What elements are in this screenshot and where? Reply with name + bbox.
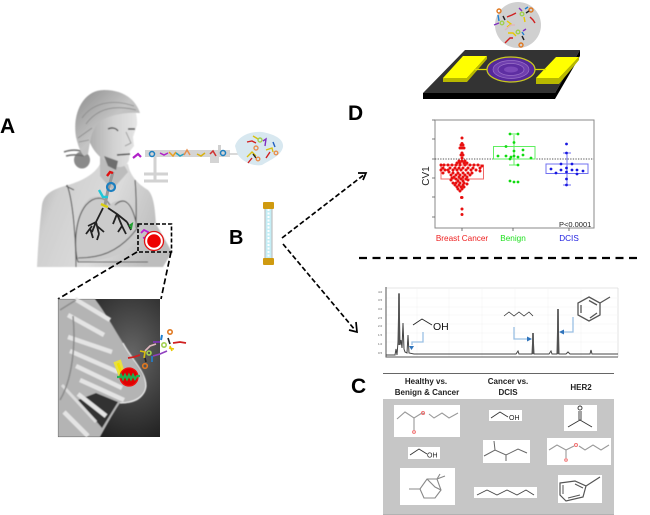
dark background: [58, 299, 160, 437]
acetone structure: [564, 405, 597, 431]
y tick labels: 3.5: [378, 298, 383, 302]
nose shadow: [125, 132, 131, 146]
dcis box: [546, 153, 588, 185]
dashed zoom lines: [58, 252, 171, 299]
ethanol structure 2: OH: [509, 415, 520, 422]
plot frame: [435, 120, 594, 228]
arrow to sensor: [282, 173, 366, 238]
column headers: Benign & Cancer: [395, 388, 459, 397]
benign box: [494, 134, 535, 165]
electrodes: [443, 56, 487, 78]
VOC sensor chip: [423, 2, 580, 99]
dashed section divider: [359, 257, 640, 259]
column headers: DCIS: [498, 388, 518, 397]
group labels: [436, 234, 579, 243]
connectors: [475, 68, 546, 70]
column headers: Healthy vs.: [405, 377, 447, 386]
ethanol structure: [413, 319, 449, 333]
lung shading: [75, 196, 138, 262]
illustration: woman with lungs: [37, 90, 172, 267]
trace: [386, 293, 618, 355]
benign points: [498, 134, 531, 182]
axes: [386, 287, 618, 357]
label D: D: [348, 102, 363, 125]
axis ticks: [432, 120, 569, 231]
torso: [37, 164, 172, 267]
arrow to chromatogram: [283, 244, 357, 332]
trachea and bronchi: [86, 172, 131, 240]
callout arrowheads: [409, 330, 564, 350]
toluene structure: [578, 297, 610, 321]
tumour in breast: [144, 232, 164, 250]
ester structure 1: [394, 405, 460, 437]
box-and-dot plot: [421, 120, 594, 243]
green molecule: [117, 375, 140, 379]
y tick labels: 1.0: [378, 342, 383, 346]
emitted molecules: [128, 330, 186, 368]
facial features: [108, 128, 135, 155]
head: [86, 96, 137, 167]
lower rib: [62, 385, 96, 422]
column headers: Cancer vs.: [488, 377, 528, 386]
group labels: Benign: [500, 234, 526, 243]
sorbent tube: [263, 202, 274, 265]
heptane structure: [474, 487, 537, 498]
group labels: DCIS: [559, 234, 579, 243]
ethanol structure 1: [408, 447, 440, 460]
left bronchi: [86, 208, 104, 240]
breast cancer box: [441, 165, 484, 179]
molecules in airway: [99, 154, 148, 238]
dark gaps: [78, 393, 118, 428]
ribs: [64, 299, 124, 436]
y tick labels: 4.0: [378, 290, 383, 294]
dashed zoom box: [138, 224, 172, 252]
y tick labels: 2.0: [378, 324, 383, 328]
pinene structure: [400, 468, 455, 505]
ethanol structure: OH: [433, 321, 449, 333]
group labels: Breast Cancer: [436, 234, 488, 243]
y tick labels: 1.5: [378, 333, 383, 337]
grey table body: [383, 399, 614, 514]
chest wall: [58, 299, 146, 437]
hair: [75, 90, 140, 156]
tube molecules: [150, 150, 226, 156]
label C: C: [351, 375, 366, 398]
grid: [386, 288, 618, 357]
ester structure 2: [547, 438, 611, 465]
hair lines: [78, 102, 136, 142]
toluene structure: [558, 475, 602, 503]
column headers: HER2: [570, 383, 592, 392]
breast outline: [120, 343, 146, 403]
breast cancer points: [441, 138, 482, 214]
dcis points: [551, 144, 583, 185]
column headers: [395, 377, 592, 397]
tube stand: [144, 157, 168, 182]
threshold line: [435, 158, 594, 160]
compound table: [383, 374, 614, 514]
label A: A: [0, 115, 15, 138]
sensing spiral: [487, 57, 535, 82]
volatile cloud: [494, 2, 541, 48]
heavy peaks: [399, 294, 558, 354]
hair bun: [74, 152, 90, 168]
y tick labels: [378, 290, 383, 355]
y tick labels: 3.0: [378, 307, 383, 311]
neck: [100, 150, 128, 190]
y axis label: CV1: [421, 166, 432, 186]
loose hair strands: [64, 150, 84, 156]
y tick labels: 2.5: [378, 316, 383, 320]
sternum edge: [60, 300, 76, 400]
right bronchi: [108, 208, 131, 234]
chromatogram: [378, 287, 618, 357]
label B: B: [229, 227, 243, 249]
breast close-up panel: [58, 299, 186, 437]
plot frame: [386, 288, 618, 357]
heptane structure: [504, 312, 533, 316]
breath sampler tube: [144, 145, 238, 182]
tumour with ring: [120, 368, 138, 386]
peak callouts: [412, 317, 573, 345]
board: [423, 50, 580, 93]
chest lines: [66, 180, 148, 267]
p value: P<0.0001: [559, 220, 591, 229]
branched alkane structure: [483, 440, 530, 463]
y tick labels: 0.5: [378, 351, 383, 355]
ethanol structure 1: OH: [427, 452, 438, 460]
jaw shadow: [104, 156, 118, 170]
ethanol structure 2: [489, 410, 522, 422]
table rules: [383, 374, 614, 514]
yellow marker: [115, 361, 124, 376]
breath sample cloud: [235, 132, 283, 165]
